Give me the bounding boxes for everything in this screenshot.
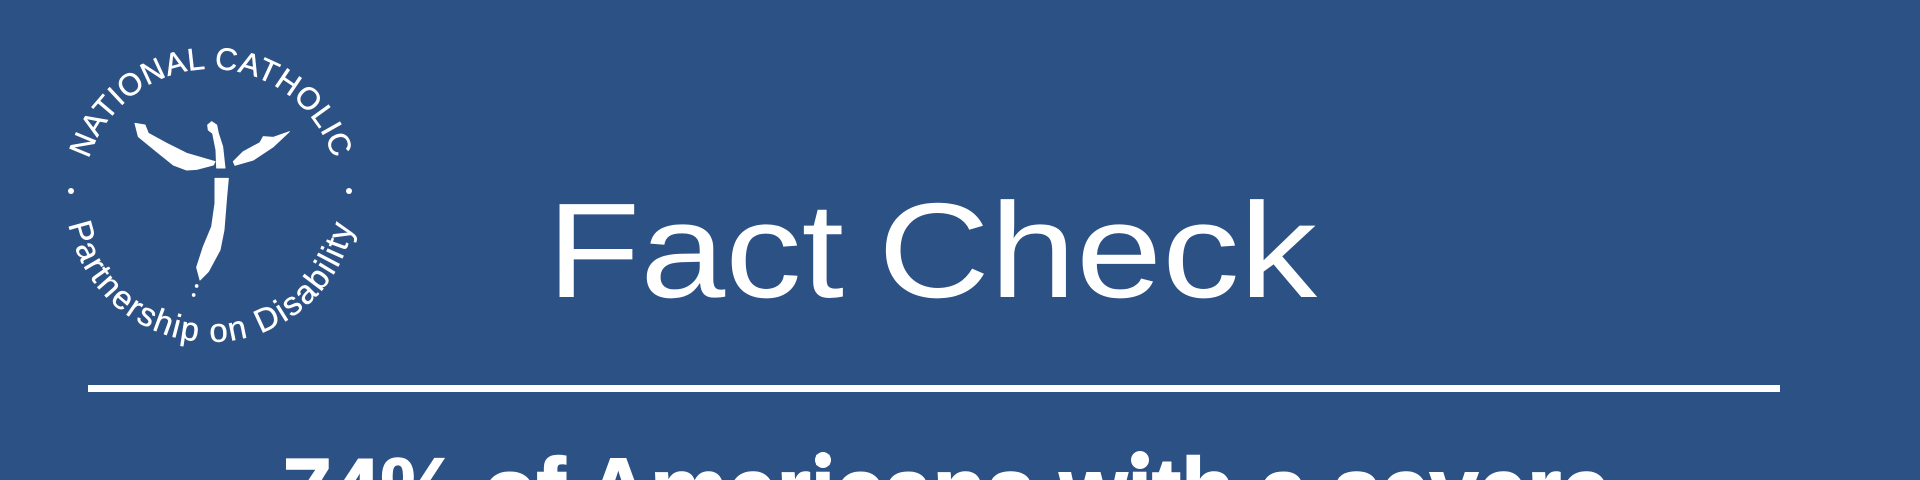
icon: cross figure [135,122,289,296]
logo dots [68,188,352,194]
divider [88,385,1780,392]
title [547,175,1318,326]
logo: National Catholic Partnership on Disability [68,48,357,346]
logo text: top arc: NATIONAL CATHOLIC [69,48,351,157]
title: Check [878,175,1318,326]
title: Fact [547,175,844,326]
logo text: bottom arc: Partnership on Disability [68,220,357,346]
